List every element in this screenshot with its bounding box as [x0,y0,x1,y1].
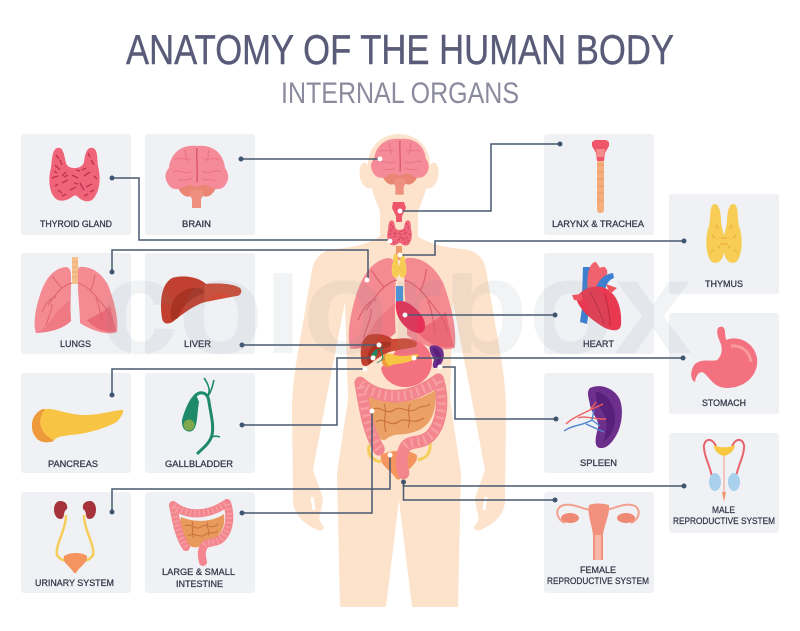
body organ: thymus [392,254,407,278]
panel: female reproductive system [544,492,654,593]
panel: pancreas [21,373,131,473]
label: intestine: INTESTINE [176,579,223,590]
leader: pancreas [110,366,368,398]
body organ: lungs [349,258,455,349]
panel: lungs [21,253,131,354]
icon: lungs [35,257,117,333]
icon: heart [572,262,621,330]
body organ: bladder [381,451,417,479]
label: larynx and trachea: LARYNX & TRACHEA [552,219,645,230]
label: thyroid gland: THYROID GLAND [40,219,112,230]
leader: heart [402,312,558,318]
icon: liver [161,276,241,324]
body organ: stomach [381,338,432,387]
label: gallbladder: GALLBLADDER [165,459,233,470]
icon: male reproductive system [704,440,744,502]
icon: spleen [564,386,622,448]
label: spleen: SPLEEN [580,458,617,469]
body organ: trachea [396,246,402,260]
panel: stomach [669,313,779,414]
body organ: larynx [392,202,406,222]
icon: gallbladder [182,378,220,454]
label: reproductive system: REPRODUCTIVE SYSTEM [547,576,649,587]
icon: thyroid [49,148,100,201]
leader: spleen [438,364,558,422]
body organ: gallbladder [371,346,386,363]
icon: stomach [691,327,757,388]
body organ: great vessels [396,286,403,304]
leader: stomach [412,356,686,360]
leader: liver [240,342,382,348]
panel: spleen [544,373,654,473]
icon: thymus [706,204,742,263]
panel: brain [145,134,255,235]
label: reproductive system: REPRODUCTIVE SYSTEM [673,516,775,527]
body organ: brain [371,139,429,195]
panel: liver [145,253,255,354]
leader: male reproductive system [401,480,686,488]
leader: thyroid gland [110,176,392,244]
panel: thymus [669,194,779,294]
icon: brain [165,146,228,208]
subtitle: INTERNAL ORGANS [281,77,519,110]
label: brain: BRAIN [182,219,211,230]
leader: lungs [110,250,370,282]
leader: female reproductive system [404,482,558,502]
panel: urinary system [21,492,131,593]
panel: thyroid gland [21,134,131,235]
panel: gallbladder [145,373,255,473]
label: male: MALE [712,505,735,516]
title: ANATOMY OF THE HUMAN BODY [126,26,674,73]
leader: larynx and trachea [398,142,562,214]
body organ: spleen [430,345,444,368]
body organ: small intestine [366,390,436,440]
label: urinary system: URINARY SYSTEM [35,578,114,589]
icon: pancreas [32,409,123,442]
label: female: FEMALE [580,565,616,576]
panel: male reproductive system [669,433,779,533]
organs placed in the body [349,139,455,479]
body organ: heart [396,301,425,333]
panel: large and small intestine [145,492,255,593]
human body silhouette [292,134,506,607]
label: pancreas: PANCREAS [48,459,98,470]
icon: intestines [173,503,229,562]
label: heart: HEART [583,339,614,350]
label: thymus: THYMUS [705,279,743,290]
leader: intestines [240,408,374,516]
panel: larynx and trachea [544,134,654,235]
label: liver: LIVER [184,339,211,350]
watermark: colorbox [100,231,692,382]
body organ: ureters [369,443,430,462]
body organ: thyroid [387,220,412,246]
leader: urinary system [110,452,392,514]
label: lungs: LUNGS [60,339,91,350]
panel: heart [544,253,654,354]
body organ: large intestine [360,380,442,473]
body organ: liver [361,334,417,366]
label: stomach: STOMACH [702,398,746,409]
leader: thymus [398,238,686,258]
label: large and small intestine: LARGE & SMALL [162,567,236,578]
body organ: pancreas [382,354,418,367]
leader: brain [238,156,382,162]
icon: larynx and trachea [592,140,609,213]
leader: gallbladder [240,356,376,428]
icon: urinary system [54,501,96,573]
icon: female reproductive system [557,504,639,560]
